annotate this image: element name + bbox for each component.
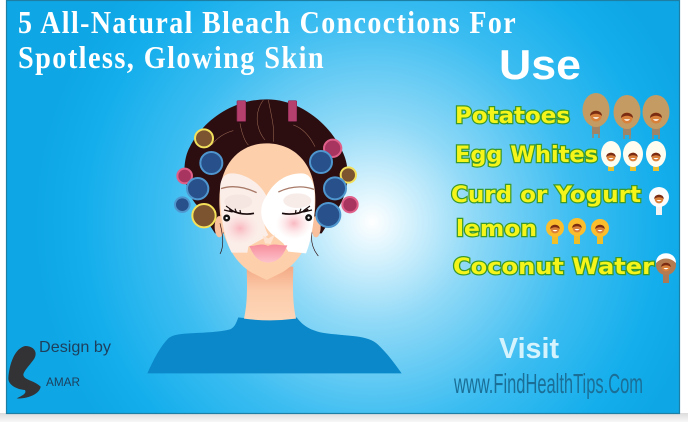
hair [184, 99, 348, 233]
icon: curd character [649, 187, 669, 215]
heading: Use: Use [499, 41, 581, 88]
page area below the panel [0, 413, 688, 422]
top pink rollers [237, 101, 297, 121]
mask: left patch [220, 173, 268, 253]
title [18, 4, 517, 75]
credit: Design by: Design by [39, 339, 111, 356]
loose hair strands [220, 223, 318, 256]
mask: right patch [261, 173, 315, 253]
title: 5 All-Natural Bleach Concoctions For [18, 4, 517, 40]
credit: Design by: AMAR [46, 377, 80, 389]
ingredient labels: Curd or Yogurt [451, 183, 641, 208]
ingredient labels: lemon [456, 217, 537, 242]
icons: egg characters [601, 141, 666, 171]
eyes [224, 206, 312, 214]
hair rollers [175, 129, 358, 227]
ingredient labels: Egg Whites [455, 143, 598, 168]
credit: Design by [39, 339, 111, 389]
ingredient labels [451, 104, 654, 280]
neck [244, 267, 296, 320]
icons: potato characters [582, 93, 670, 139]
icons: lemon characters [546, 218, 609, 244]
blush [221, 212, 259, 245]
link: Visit: Visit [499, 333, 559, 365]
face [219, 143, 315, 280]
eyelids [224, 194, 252, 209]
ingredient labels: Coconut Water [453, 255, 654, 280]
illustration: woman with face mask and hair rollers [147, 99, 402, 373]
eyebrows [221, 187, 314, 193]
icon: coconut character [656, 253, 676, 283]
hair highlights and strands [212, 100, 315, 147]
ears [215, 216, 224, 237]
shirt [147, 317, 402, 373]
logo: S mark [8, 346, 41, 398]
beauty marks [224, 215, 311, 220]
ingredient labels: Potatoes [455, 104, 570, 129]
title: Spotless, Glowing Skin [18, 39, 325, 75]
lips [249, 244, 287, 263]
nose [263, 234, 275, 244]
